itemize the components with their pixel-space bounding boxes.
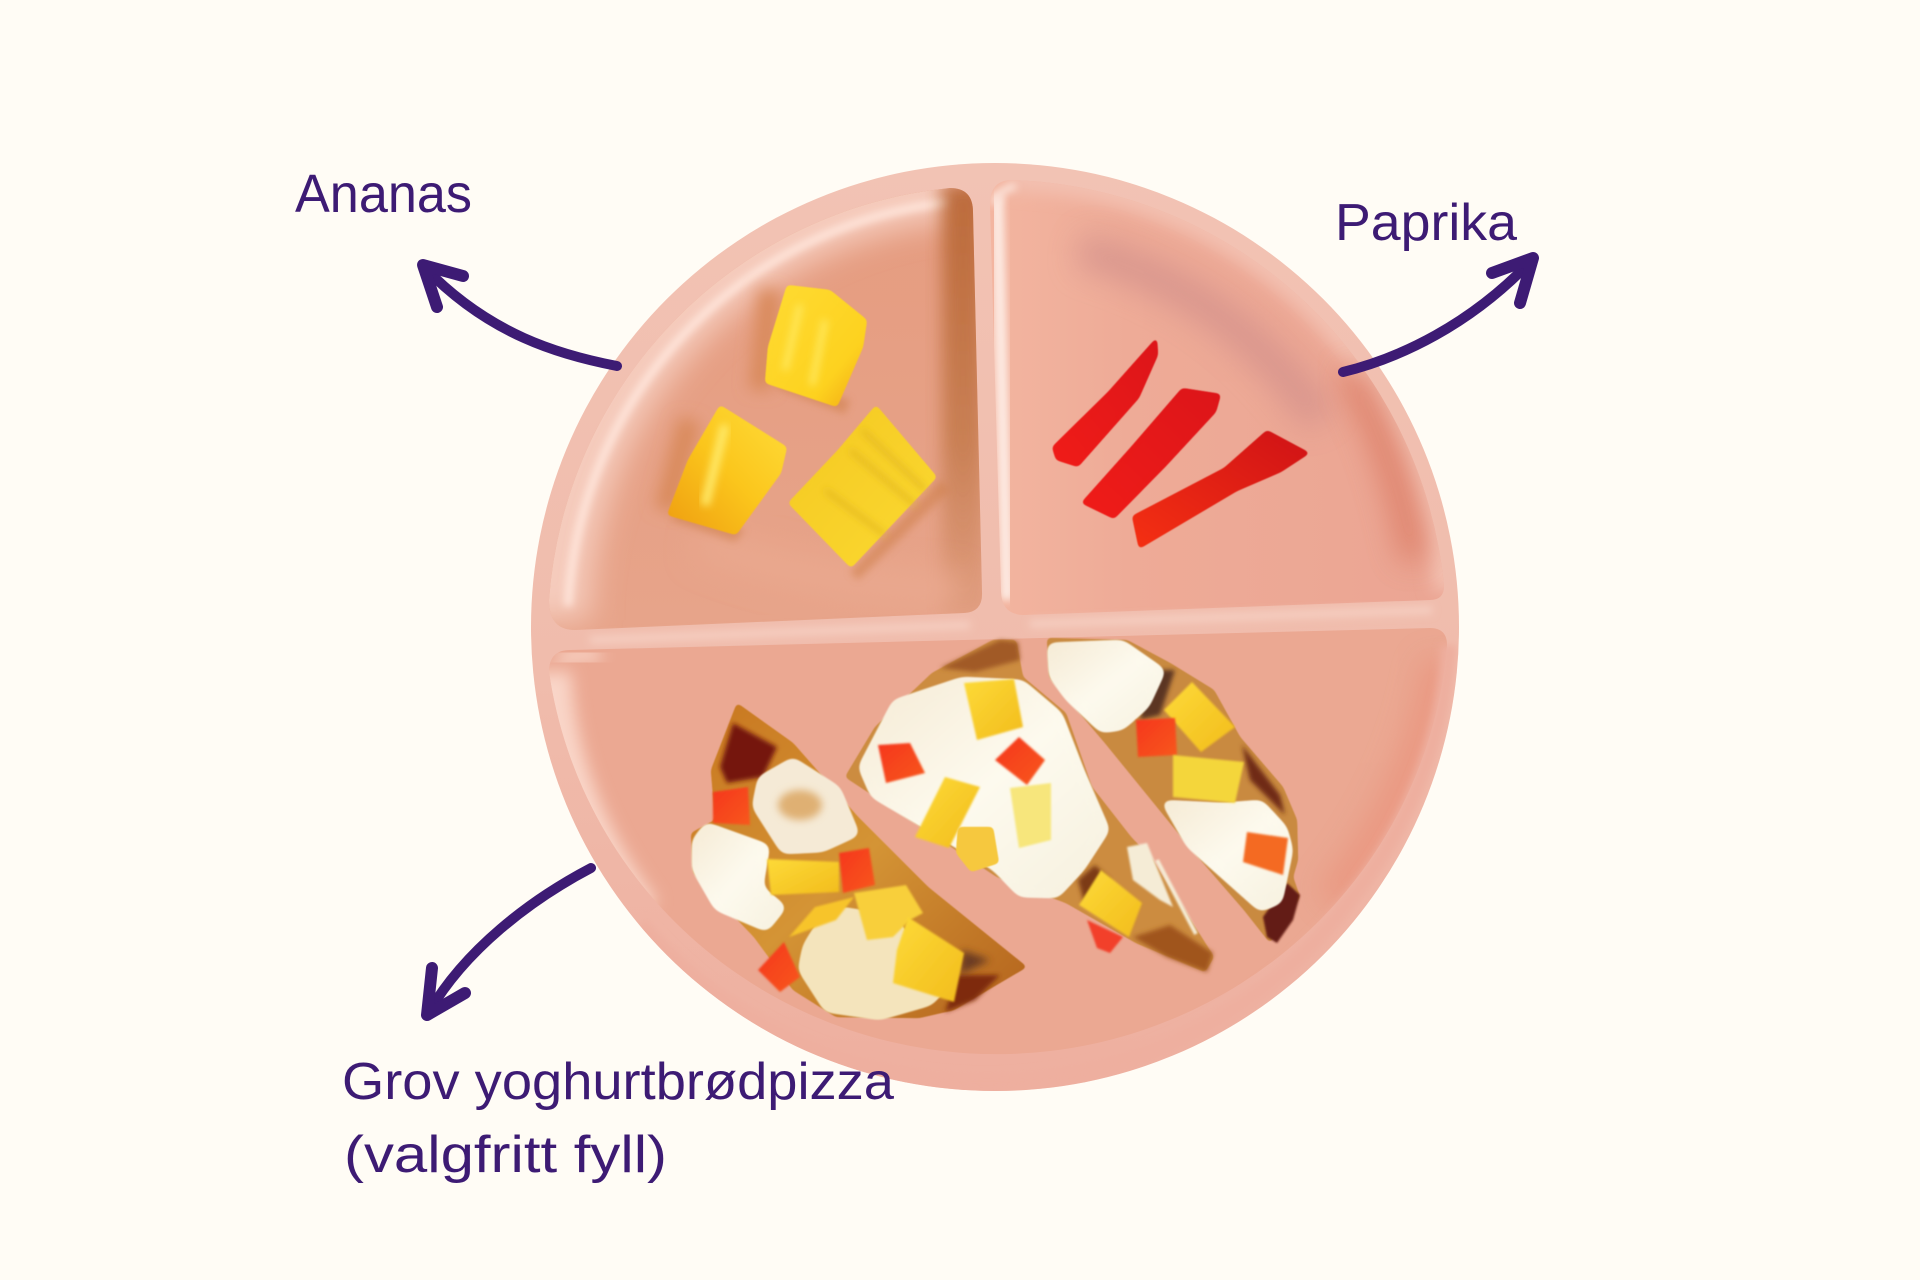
arrow: to pizza label xyxy=(427,868,591,1015)
divider highlight xyxy=(590,610,1432,640)
pineapple piece 3 xyxy=(788,405,937,568)
pepper strip 1 xyxy=(1052,337,1158,467)
panel: bottom compartment xyxy=(549,628,1449,1083)
arrow: to pepper label xyxy=(1343,258,1533,372)
label: Grov yoghurtbrødpizza: Grov yoghurtbrødpizza xyxy=(342,1053,894,1111)
pepper strip 2 xyxy=(1081,388,1221,519)
food: pizza slice left xyxy=(691,703,1027,1020)
panel: top-left compartment xyxy=(549,180,984,630)
pepper strip 3 xyxy=(1132,430,1310,549)
plate xyxy=(531,163,1459,1091)
panel: top-right compartment xyxy=(990,176,1448,615)
pineapple piece 2 xyxy=(667,405,787,535)
label: Paprika: Paprika xyxy=(1335,194,1517,252)
food: pizza slice right xyxy=(1047,638,1300,943)
pineapple piece 1 xyxy=(765,285,867,407)
food: red pepper strips xyxy=(1052,337,1310,549)
label: Grov yoghurtbrødpizza xyxy=(342,1053,894,1184)
label: Ananas: Ananas xyxy=(295,164,472,224)
plate rim xyxy=(531,163,1459,1091)
food: pizza slice middle xyxy=(845,640,1214,972)
arrow: to pineapple label xyxy=(423,265,617,366)
pineapple shadows xyxy=(670,375,950,580)
label: Grov yoghurtbrødpizza: (valgfritt fyll) xyxy=(344,1126,667,1184)
food: pineapple pieces xyxy=(667,285,950,580)
